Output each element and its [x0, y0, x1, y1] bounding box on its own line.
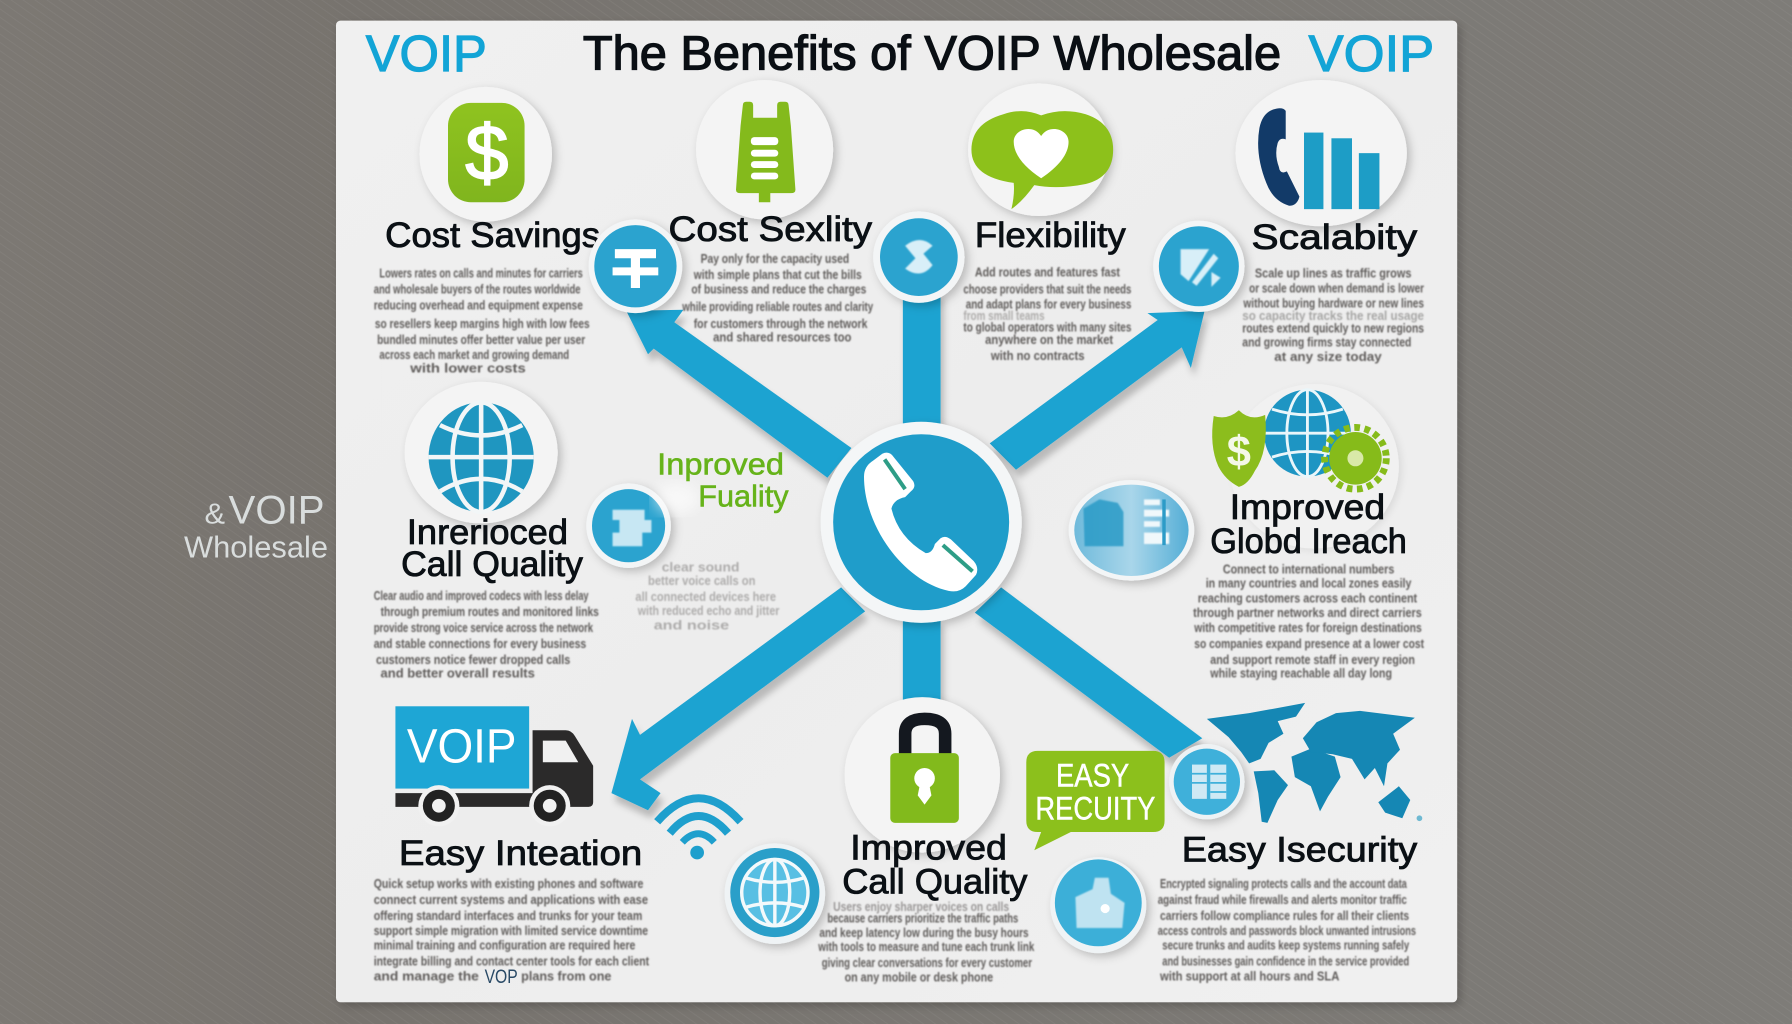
logo: VOIP left: VOIP [366, 24, 487, 82]
green callout: Easy Recuity [1026, 751, 1165, 850]
text block: easy inteation: connect current systems and applications with ease [374, 893, 648, 907]
text block: global reach: and support remote staff in every region [1210, 653, 1415, 667]
icon: dollar badge: $ [465, 110, 508, 196]
icon: globe with dollar and gear: $ [1227, 428, 1251, 476]
small badge: top right [1153, 221, 1245, 312]
benefit: improved global reach [1193, 384, 1425, 681]
text block: easy isecurity: and businesses gain confidence in the service provided [1162, 955, 1409, 969]
benefit: easy inteation [374, 706, 650, 988]
text block: cost sexlity [682, 252, 873, 345]
icon: speech bubble with heart [971, 111, 1113, 209]
heading: Inrerioced Call Quality: Call Quality [401, 544, 583, 584]
text block: easy inteation: offering standard interfaces and trunks for your team [374, 909, 642, 923]
text block: improved call quality: on any mobile or desk phone [845, 971, 993, 985]
small badge: faded middle right [1069, 480, 1194, 581]
main panel [336, 21, 1457, 1002]
heading: Improved Call Quality [842, 827, 1028, 902]
small badge: bottom right [1050, 857, 1146, 953]
heading: Cost Savings: Cost Savings [385, 215, 600, 255]
heading: Improved Globd Ireach: Globd Ireach [1210, 521, 1407, 561]
logo: VOIP right: VOIP [1309, 24, 1434, 82]
title: The Benefits of VOIP Wholesale [583, 28, 1281, 81]
text block: easy inteation: support simple migration with limited service downtime [374, 924, 648, 938]
text block: global reach: through partner networks and direct carriers [1193, 606, 1422, 620]
text block: scalability: routes extend quickly to new regions [1242, 322, 1424, 336]
text block: improved call quality: because carriers prioritize the traffic paths [827, 911, 1018, 925]
text block: cost savings: across each market and growing demand [379, 348, 569, 362]
text block: faded middle [635, 560, 780, 633]
benefit: flexibility [963, 83, 1131, 363]
inline mark: VOP: VOP [485, 966, 518, 988]
icon: globe [429, 402, 534, 512]
side text: VOIP Wholesale: & [205, 498, 225, 530]
text block: improved call quality [818, 900, 1034, 985]
small badge: top left [589, 219, 682, 313]
text block: flexibility: from small teams [963, 309, 1045, 323]
heading: Inrerioced Call Quality [401, 512, 583, 584]
text block: global reach: so companies expand presence at a lower cost [1194, 637, 1425, 651]
text block: easy inteation: integrate billing and contact center tools for each client [374, 955, 650, 969]
benefit: cost savings [374, 87, 600, 376]
text block: cost sexlity: while providing reliable routes and clarity [682, 300, 873, 314]
text block: cost savings: reducing overhead and equipment expense [374, 299, 583, 313]
text block: cost sexlity: for customers through the network [694, 317, 867, 331]
text block: inrerioced call quality: Clear audio and improved codecs with less delay [374, 589, 589, 603]
text block: cost savings: with lower costs [409, 362, 526, 376]
text block: scalability: Scale up lines as traffic grows [1255, 267, 1411, 281]
small badge: middle left [586, 483, 671, 568]
heading: Easy Isecurity: Easy Isecurity [1182, 830, 1417, 870]
text block: flexibility: with no contracts [990, 349, 1085, 363]
text block: cost savings: bundled minutes offer better value per user [377, 333, 585, 347]
heading: Improved Call Quality: Call Quality [842, 862, 1028, 902]
heading: Improved Globd Ireach [1210, 487, 1407, 561]
text block: flexibility: to global operators with many sites [963, 320, 1131, 334]
text block: scalability: so capacity tracks the real usage [1242, 309, 1424, 323]
text block: global reach: in many countries and local zones easily [1206, 576, 1411, 590]
icon: phone with bars [1258, 108, 1379, 209]
text block: global reach: reaching customers across each continent [1198, 591, 1418, 605]
heading: Flexibility: Flexibility [975, 215, 1126, 255]
text block: cost sexlity: Pay only for the capacity used [701, 252, 849, 266]
text block: faded middle: with reduced echo and jitter [637, 604, 780, 618]
text block: inrerioced call quality: provide strong voice service across the network [374, 621, 593, 635]
heading: Easy Inteation: Easy Inteation [399, 833, 642, 873]
benefit: inrerioced call quality [374, 382, 599, 681]
icon: VOIP truck: VOIP [407, 720, 517, 773]
heading: Inrerioced Call Quality: Inrerioced [407, 512, 568, 552]
text block: inrerioced call quality: through premium routes and monitored links [381, 605, 599, 619]
text block: easy isecurity: carriers follow compliance rules for all their clients [1160, 909, 1409, 923]
world map [1207, 703, 1422, 823]
text block: improved call quality: Users enjoy sharper voices on calls [833, 900, 1009, 914]
arrows radiating from the centre [611, 291, 1205, 810]
text block: easy isecurity: with support at all hours and SLA [1159, 970, 1339, 984]
small badge: top centre [873, 211, 965, 303]
small badge: top of world map [1169, 744, 1245, 819]
text block: cost savings: so resellers keep margins high with low fees [375, 317, 590, 331]
text block: cost sexlity: and shared resources too [713, 331, 852, 345]
text block: cost sexlity: with simple plans that cut the bills [693, 268, 862, 282]
text block: flexibility: and adapt plans for every business [966, 298, 1131, 312]
green label: Inproved Fuality: Fuality [698, 478, 789, 513]
text block: cost savings [374, 267, 590, 376]
text block: easy isecurity: secure trunks and audits keep systems running safely [1162, 939, 1409, 953]
side text: VOIP Wholesale: VOIP [229, 488, 325, 532]
icon: wifi [657, 798, 741, 859]
text block: inrerioced call quality: and stable connections for every business [374, 637, 586, 651]
text block: inrerioced call quality: and better overall results [381, 667, 535, 681]
benefit: cost sexlity [669, 80, 873, 345]
side text: VOIP Wholesale [184, 488, 328, 565]
icon: VOIP truck [395, 706, 593, 826]
text block: global reach: Connect to international numbers [1223, 563, 1394, 577]
green callout: Easy Recuity: RECUITY [1035, 790, 1155, 826]
small badge: globe [725, 843, 825, 944]
text block: easy inteation: Quick setup works with existing phones and software [374, 877, 643, 891]
text block: global reach [1193, 563, 1425, 681]
text block: easy inteation: minimal training and configuration are required here [374, 939, 635, 953]
green label: Inproved Fuality: Inproved [657, 446, 784, 481]
text block: easy inteation [374, 877, 650, 984]
icon: padlock [890, 719, 959, 823]
text block: cost sexlity: of business and reduce the charges [691, 283, 866, 297]
text block: scalability [1242, 267, 1424, 364]
side text: VOIP Wholesale: Wholesale [184, 530, 328, 565]
text block: easy isecurity [1158, 877, 1416, 984]
text block: cost savings: and wholesale buyers of the routes worldwide [374, 283, 581, 297]
text block: inrerioced call quality: customers notice fewer dropped calls [376, 653, 570, 667]
text block: easy isecurity: access controls and passwords block unwanted intrusions [1158, 924, 1416, 938]
green callout: Easy Recuity: EASY [1056, 757, 1129, 793]
text block: easy isecurity: Encrypted signaling protects calls and the account data [1160, 877, 1408, 891]
icon: dollar badge [448, 103, 525, 202]
benefit: easy isecurity [1158, 830, 1417, 984]
text block: scalability: without buying hardware or new lines [1243, 296, 1424, 310]
green label: Inproved Fuality [654, 446, 789, 514]
text block: improved call quality: with tools to measure and tune each trunk link [818, 940, 1034, 954]
icon: globe with dollar and gear [1212, 390, 1386, 489]
heading: Improved Call Quality: Improved [850, 827, 1007, 867]
text block: scalability: and growing firms stay connected [1242, 335, 1411, 349]
text block: flexibility: anywhere on the market [985, 333, 1114, 347]
text block: faded middle: and noise [654, 619, 729, 633]
text block: improved call quality: and keep latency low during the busy hours [819, 926, 1029, 940]
text block: easy isecurity: against fraud while firewalls and alerts monitor traffic [1158, 893, 1407, 907]
text block: flexibility: Add routes and features fast [975, 266, 1121, 280]
centre phone badge [821, 422, 1022, 623]
heading: Improved Globd Ireach: Improved [1230, 487, 1385, 527]
text block: global reach: while staying reachable all day long [1209, 667, 1392, 681]
text block: improved call quality: giving clear conversations for every customer [822, 956, 1032, 970]
text block: flexibility [963, 266, 1131, 363]
text block: global reach: with competitive rates for foreign destinations [1193, 621, 1422, 635]
text block: flexibility: choose providers that suit the needs [963, 283, 1131, 297]
benefit: scalability [1235, 80, 1424, 364]
icon: green device [736, 102, 795, 202]
heading: Cost Sexlity: Cost Sexlity [669, 209, 872, 249]
heading: Scalabity: Scalabity [1251, 217, 1417, 257]
text block: inrerioced call quality [374, 589, 599, 681]
text block: faded middle: better voice calls on [648, 574, 755, 588]
benefit: improved call quality (security lock) [818, 697, 1034, 985]
text block: easy inteation: and manage the [374, 970, 479, 984]
text block: easy inteation: plans from one [521, 970, 611, 984]
text block: cost savings: Lowers rates on calls and minutes for carriers [379, 267, 583, 281]
text block: scalability: or scale down when demand is lower [1249, 282, 1424, 296]
text block: faded middle: all connected devices here [635, 590, 776, 604]
text block: scalability: at any size today [1274, 350, 1382, 364]
text block: faded middle: clear sound [662, 560, 739, 574]
